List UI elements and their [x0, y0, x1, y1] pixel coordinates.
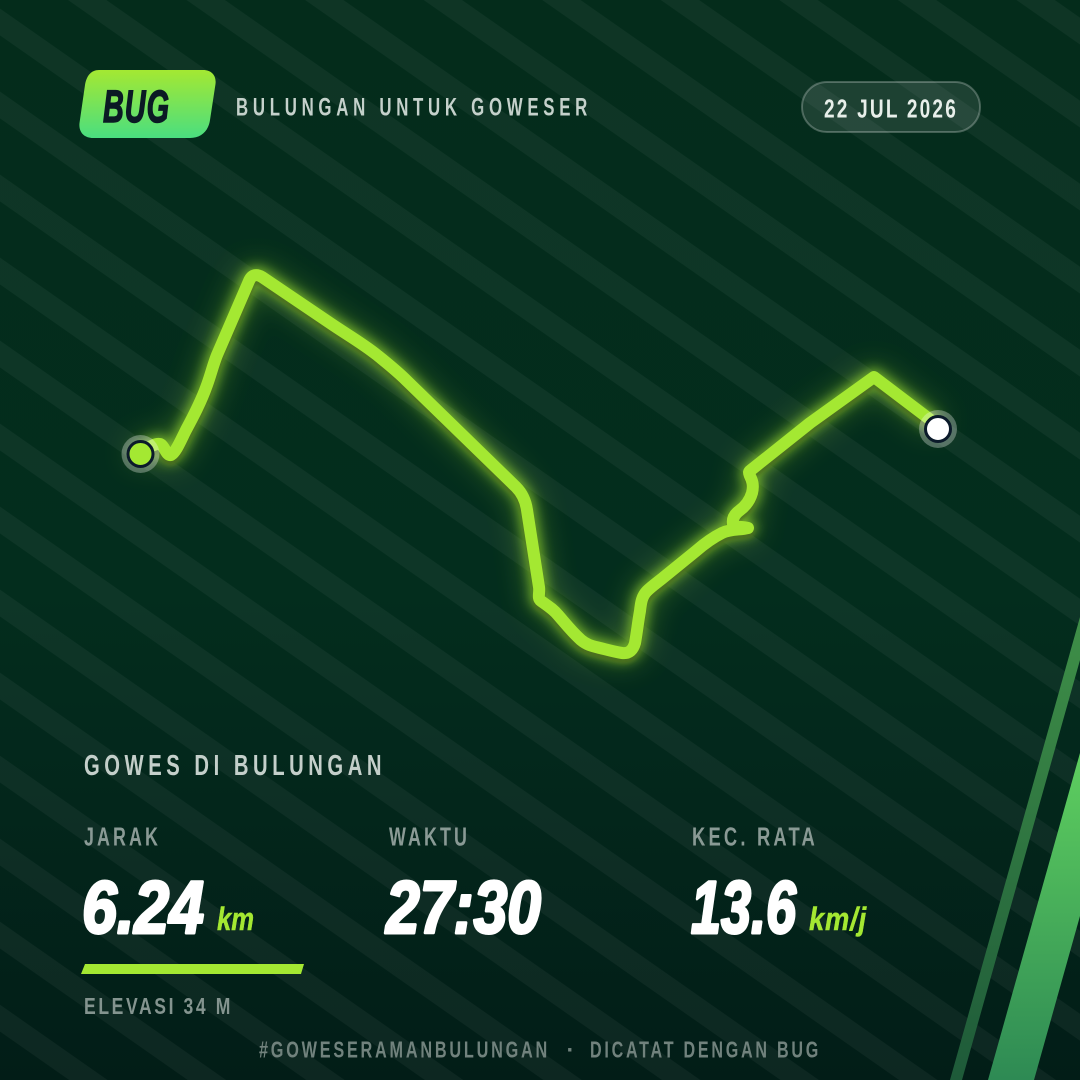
stat: time: WAKTU: [389, 822, 470, 852]
stat: time: 27:30: [384, 866, 541, 949]
stat: distance: JARAK: [84, 822, 161, 852]
end marker: [919, 410, 957, 448]
tagline: BULUNGAN UNTUK GOWESER: [236, 94, 592, 122]
stat: average speed: km/j: [809, 901, 867, 937]
stat: distance: ELEVASI 34 M: [84, 993, 233, 1019]
stat: distance: km: [217, 901, 254, 937]
footer: DICATAT DENGAN BUG: [590, 1036, 821, 1062]
stat: distance: 6.24: [82, 866, 204, 949]
stat: time: [384, 822, 541, 949]
stat: distance: [81, 822, 304, 1019]
section title: GOWES DI BULUNGAN: [84, 750, 386, 782]
footer: #GOWESERAMANBULUNGAN: [259, 1036, 550, 1062]
date pill: 22 JUL 2026: [824, 94, 958, 124]
route map: [122, 275, 957, 657]
logo badge: [79, 70, 216, 138]
header: [79, 70, 980, 138]
stat: average speed: [691, 822, 867, 949]
footer: ·: [566, 1036, 574, 1062]
route line: [140, 275, 932, 653]
stat: average speed: 13.6: [691, 866, 797, 949]
stat: average speed: KEC. RATA: [692, 822, 818, 852]
corner slashes: [950, 617, 1080, 1080]
logo badge: BUG: [103, 81, 170, 132]
route glow: [140, 275, 932, 657]
distance bar: [81, 964, 304, 974]
start marker: [122, 435, 160, 473]
date pill: [802, 82, 980, 132]
